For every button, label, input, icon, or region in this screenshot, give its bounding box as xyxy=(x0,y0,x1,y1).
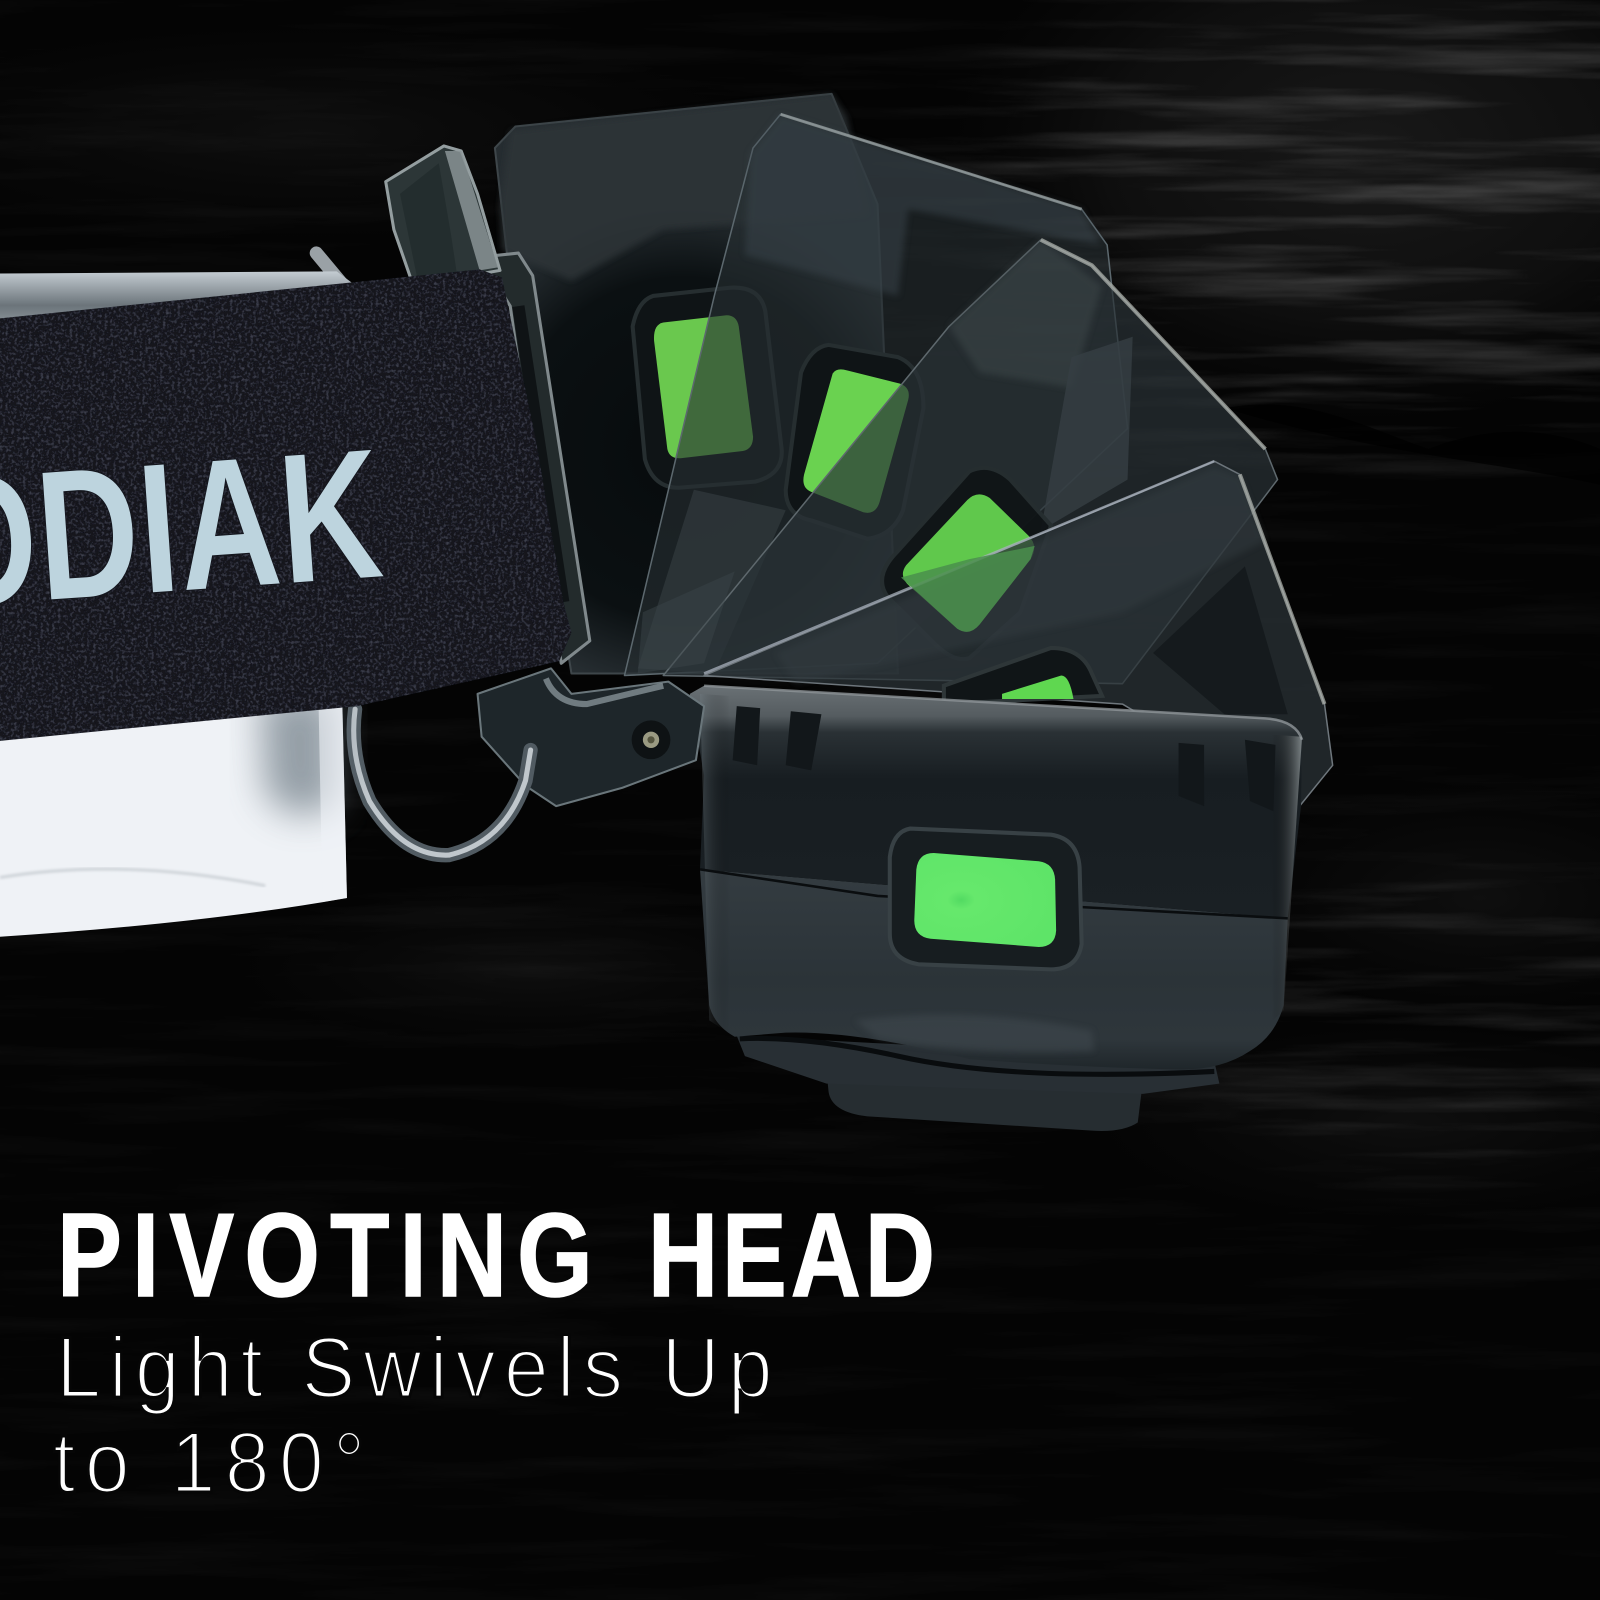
ghost 3 green button xyxy=(903,494,1034,632)
bracket hinge with pivot pin xyxy=(478,668,704,806)
ghost head 2 xyxy=(624,114,1128,676)
headband strap xyxy=(0,269,571,741)
base plate xyxy=(737,1036,1219,1094)
pivot pin xyxy=(632,720,670,759)
ghost 3 button frame xyxy=(882,468,1051,659)
lower body xyxy=(700,869,1288,1070)
subtitle line 1: Light Swivels Up xyxy=(56,1318,773,1416)
clear frame beside strap xyxy=(480,253,590,663)
title xyxy=(57,1189,935,1321)
notches xyxy=(733,706,1276,811)
ghost 2 button frame xyxy=(786,345,923,539)
lens base xyxy=(827,1071,1143,1131)
ghost head 1: most upright position xyxy=(495,94,898,673)
white spool behind strap xyxy=(0,271,369,937)
ghost 4 overlap on green button 3 xyxy=(901,546,1035,632)
title: HEAD xyxy=(648,1189,935,1321)
D-ring and wire clip xyxy=(316,253,531,855)
ghost 1 green button xyxy=(654,315,753,458)
ghost 1 button frame xyxy=(633,288,782,488)
upper body xyxy=(690,686,1302,918)
rim highlight xyxy=(704,686,1302,740)
title: PIVOTING xyxy=(57,1189,593,1321)
ghost 4 green button xyxy=(1002,676,1073,699)
seam line xyxy=(700,869,1288,918)
main head xyxy=(690,686,1302,1131)
side shading xyxy=(700,694,1302,1069)
lower lip xyxy=(855,1015,1094,1052)
spool shadow xyxy=(260,694,337,816)
main green button xyxy=(914,853,1056,947)
headband clip xyxy=(386,146,500,286)
ghost 2 green button xyxy=(803,369,909,513)
subtitle line 2: to 180° xyxy=(53,1413,365,1510)
ghost head 4 xyxy=(704,461,1333,808)
background: dark feather texture xyxy=(66,0,1600,1187)
ghost head 3 xyxy=(638,240,1278,684)
button frame xyxy=(890,829,1082,969)
ghost 4 button frame xyxy=(944,648,1102,704)
spool right edge xyxy=(318,684,347,902)
